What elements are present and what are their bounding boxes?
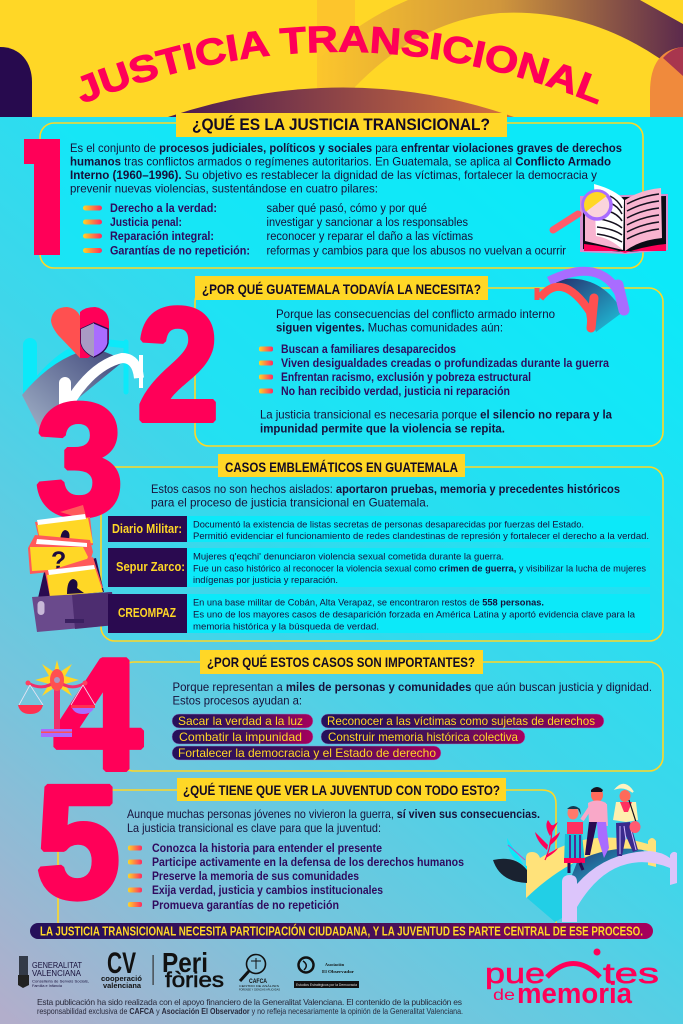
case: Sepur Zarco: Sepur Zarco:: [116, 559, 185, 574]
list: communities: No han recibido verdad, justicia ni reparación: [281, 386, 510, 398]
icon: heart, shield and arrow: [22, 307, 141, 440]
list: youth actions: Participe activamente en la defensa de los derechos humanos: [152, 857, 464, 869]
list: four pillars: Derecho a la verdad:: [110, 203, 217, 215]
pills: goals: Combatir la impunidad: [179, 730, 302, 744]
text block: youth intro: La justicia transicional es clave para que la juventud:: [127, 821, 381, 835]
logo: cooperació valenciana: [101, 947, 154, 990]
list: youth actions: Promueva garantías de no repetición: [152, 900, 339, 912]
logo: Perifèries: Peri: [162, 947, 208, 978]
logo: Asociación El Observador: [294, 958, 359, 988]
logo: Puentes de Memoria: tes: [603, 958, 659, 990]
heading 2: ¿POR QUÉ GUATEMALA TODAVÍA LA NECESITA?: [202, 281, 481, 297]
text block: why needed: siguen vigentes. Muchas comunidades aún:: [276, 320, 503, 334]
case: Diario Militar: Documentó la existencia de listas secretas de personas desaparecidas por fuerzas del Estado.: [193, 520, 584, 530]
list: four pillars: investigar y sancionar a los responsables: [266, 217, 468, 229]
list: communities: [259, 344, 610, 398]
case: CREOMPAZ: [108, 594, 650, 633]
panel 3 outline: [101, 467, 663, 641]
heading 3: CASOS EMBLEMÁTICOS EN GUATEMALA: [225, 459, 458, 475]
case: Sepur Zarco: Fue un caso histórico al reconocer la violencia sexual como crimen de guerra, y visibilizar la lucha de mujeres: [193, 564, 646, 574]
list: four pillars: reconocer y reparar el daño a las víctimas: [266, 231, 473, 243]
heading 4: [200, 650, 483, 674]
case: CREOMPAZ: Es uno de los mayores casos de desaparición forzada en América Latina y aportó evidencia clave para la: [193, 610, 636, 620]
pills: goals: Fortalecer la democracia y el Estado de derecho: [178, 746, 436, 760]
list: youth actions: [128, 843, 464, 912]
text block: silence: impunidad permite que la violencia se repita.: [260, 422, 505, 436]
logo: CAFCA: CENTRO DE ANÁLISIS: [239, 984, 279, 988]
icon: curved arrows: [537, 271, 624, 332]
icon: folders and archive box: [28, 505, 115, 632]
list: youth actions: Exija verdad, justicia y cambios institucionales: [152, 885, 383, 897]
logo: Generalitat Valenciana: GENERALITAT: [32, 961, 82, 970]
logo: Generalitat Valenciana: Conselleria de Serveis Socials,: [32, 980, 89, 984]
heading 5: ¿QUÉ TIENE QUE VER LA JUVENTUD CON TODO ESTO?: [183, 782, 500, 798]
number 4: 4: [54, 627, 142, 803]
text block: definition: Es el conjunto de procesos judiciales, políticos y sociales para enfrentar violaciones graves de derechos: [70, 141, 622, 155]
logo: cooperació valenciana: cooperació: [101, 974, 142, 983]
panel 4 outline: [120, 662, 663, 771]
case: Sepur Zarco: indígenas por justicia y reparación.: [193, 575, 338, 586]
case: CREOMPAZ: memoria histórica y la búsqueda de verdad.: [193, 622, 379, 632]
logo: CAFCA: CAFCA: [249, 979, 268, 985]
text block: youth intro: [127, 807, 540, 835]
logo: cooperació valenciana: valenciana: [103, 981, 142, 990]
text block: definition: Interno (1960–1996). Su objetivo es restablecer la dignidad de las víctimas, fortalecer la democracia y: [70, 168, 597, 182]
text block: importance: [172, 680, 652, 708]
heading 4: ¿POR QUÉ ESTOS CASOS SON IMPORTANTES?: [207, 654, 475, 670]
text block: disclaimer: Esta publicación ha sido realizada con el apoyo financiero de la Generalitat Valenciana. El contenido de la publicación es: [37, 997, 462, 1007]
logo: Generalitat Valenciana: VALENCIANA: [32, 969, 82, 978]
logo: CAFCA: [239, 954, 280, 992]
list: communities: Buscan a familiares desaparecidos: [281, 344, 456, 356]
list: four pillars: Reparación integral:: [110, 231, 214, 243]
list: communities: Viven desigualdades creadas o profundizadas durante la guerra: [281, 358, 610, 370]
case: Diario Militar: Diario Militar:: [112, 521, 182, 536]
header band: [0, 0, 683, 117]
pills: goals: [172, 714, 604, 760]
logo: Generalitat Valenciana: [18, 956, 89, 988]
case: Diario Militar: [108, 516, 650, 542]
text block: definition: [70, 141, 622, 196]
icon: scales of justice: [18, 660, 95, 737]
list: youth actions: Conozca la historia para entender el presente: [152, 843, 382, 855]
number 3: 3: [36, 372, 123, 548]
panel 2 outline: [195, 288, 663, 446]
title: JUSTICIA TRANSICIONAL: [79, 26, 599, 105]
case: Sepur Zarco: Mujeres q'eqchi' denunciaron violencia sexual cometida durante la guerra.: [193, 552, 504, 562]
logo: Generalitat Valenciana: Família e Infància: [32, 984, 62, 988]
logo: CAFCA: FORENSE Y CIENCIAS APLICADAS: [239, 988, 280, 992]
list: four pillars: Justicia penal:: [110, 217, 182, 229]
heading 3: [218, 454, 465, 477]
panel 1 outline: [40, 123, 643, 268]
number 5: 5: [36, 752, 120, 931]
list: four pillars: saber qué pasó, cómo y por qué: [266, 203, 427, 215]
text block: cases intro: Estos casos no son hechos aislados: aportaron pruebas, memoria y precedentes históricos: [151, 482, 620, 496]
list: communities: Enfrentan racismo, exclusión y pobreza estructural: [281, 372, 531, 384]
logo: Puentes de Memoria: pue: [485, 958, 545, 990]
case: CREOMPAZ: CREOMPAZ: [118, 605, 176, 620]
text block: disclaimer: responsabilidad exclusiva de CAFCA y Asociación El Observador y no refleja necesariamente la opinión de la Generalitat Valenciana.: [37, 1006, 463, 1016]
text block: why needed: [276, 307, 555, 334]
text block: cases intro: para el proceso de justicia transicional en Guatemala.: [151, 496, 429, 510]
text block: importance: Porque representan a miles de personas y comunidades que aún buscan justicia y dignidad.: [172, 680, 652, 694]
heading 2: [195, 276, 488, 300]
logo: Asociación El Observador: El Observador: [322, 969, 354, 974]
heading 1: ¿QUÉ ES LA JUSTICIA TRANSICIONAL?: [192, 115, 490, 134]
case: Diario Militar: Permitió evidenciar el funcionamiento de redes clandestinas de represión y fortalecer el derecho a la verdad.: [193, 531, 649, 542]
text block: silence: [260, 408, 612, 436]
logo: cooperació valenciana: CV: [107, 947, 136, 980]
text block: silence: La justicia transicional es necesaria porque el silencio no repara y la: [260, 408, 612, 422]
icon: folders and archive box: ?: [51, 547, 66, 575]
number 1: [24, 139, 60, 255]
text block: cases intro: [151, 482, 620, 510]
logo: Puentes de Memoria: [485, 948, 659, 1010]
number 2: 2: [137, 275, 219, 454]
heading 5: [177, 778, 506, 801]
logo: Perifèries: [162, 947, 224, 992]
list: four pillars: reformas y cambios para que los abusos no vuelvan a ocurrir: [266, 246, 566, 258]
logo: Asociación El Observador: Estudios Estratégicos por la Democracia: [296, 983, 357, 987]
logo: Asociación El Observador: Asociación: [325, 962, 344, 967]
case: Sepur Zarco: [108, 548, 650, 587]
case: CREOMPAZ: En una base militar de Cobán, Alta Verapaz, se encontraron restos de 558 personas.: [193, 598, 544, 608]
list: four pillars: Garantías de no repetición:: [110, 246, 250, 258]
text block: why needed: Porque las consecuencias del conflicto armado interno: [276, 307, 555, 321]
logo: Puentes de Memoria: de: [493, 987, 515, 1004]
icon: open book with magnifier: [553, 184, 668, 254]
list: four pillars: [83, 203, 566, 258]
pills: goals: Reconocer a las víctimas como sujetas de derechos: [327, 714, 595, 728]
logo: Puentes de Memoria: memoria: [517, 978, 633, 1010]
text block: definition: prevenir nuevas violencias, sustentándose en cuatro pilares:: [70, 182, 378, 196]
logo: Perifèries: fòries: [165, 969, 224, 992]
panel 5 outline: [58, 790, 556, 931]
text block: definition: humanos tras conflictos armados o regímenes autoritarios. En Guatemala, se aplica al Conflicto Armado: [70, 154, 611, 168]
illustration: youth crossing bridge: [493, 785, 677, 922]
text block: importance: Estos procesos ayudan a:: [172, 694, 302, 708]
text block: youth intro: Aunque muchas personas jóvenes no vivieron la guerra, sí viven sus consecuencias.: [127, 807, 540, 821]
pills: goals: Sacar la verdad a la luz: [178, 714, 303, 728]
text block: disclaimer: [37, 997, 463, 1016]
pills: goals: Construir memoria histórica colectiva: [328, 730, 518, 744]
list: youth actions: Preserve la memoria de sus comunidades: [152, 871, 359, 883]
